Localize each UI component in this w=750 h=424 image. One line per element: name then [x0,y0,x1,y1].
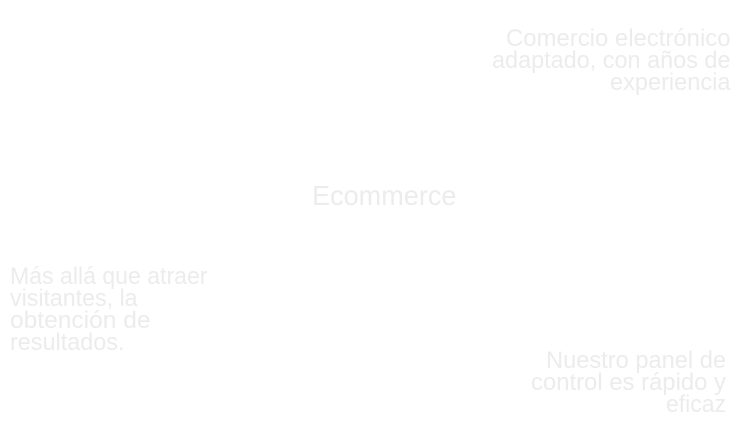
text block: top right: Comercio electrónico [506,25,730,52]
text block: bottom right: control es rápido y [531,369,726,396]
text block: top right: adaptado, con años de [492,47,730,74]
text block: left [10,263,208,356]
text block: left: Más allá que atraer [10,263,208,290]
text block: bottom right: eficaz [666,391,726,418]
text block: top right [492,25,731,96]
text block: bottom right [531,347,726,418]
heading: center: Ecommerce [312,180,456,211]
text block: top right: experiencia [610,69,731,96]
text block: left: obtención de [10,307,150,334]
text block: left: resultados. [10,329,124,356]
text block: bottom right: Nuestro panel de [546,347,726,374]
text block: left: visitantes, la [10,285,138,312]
